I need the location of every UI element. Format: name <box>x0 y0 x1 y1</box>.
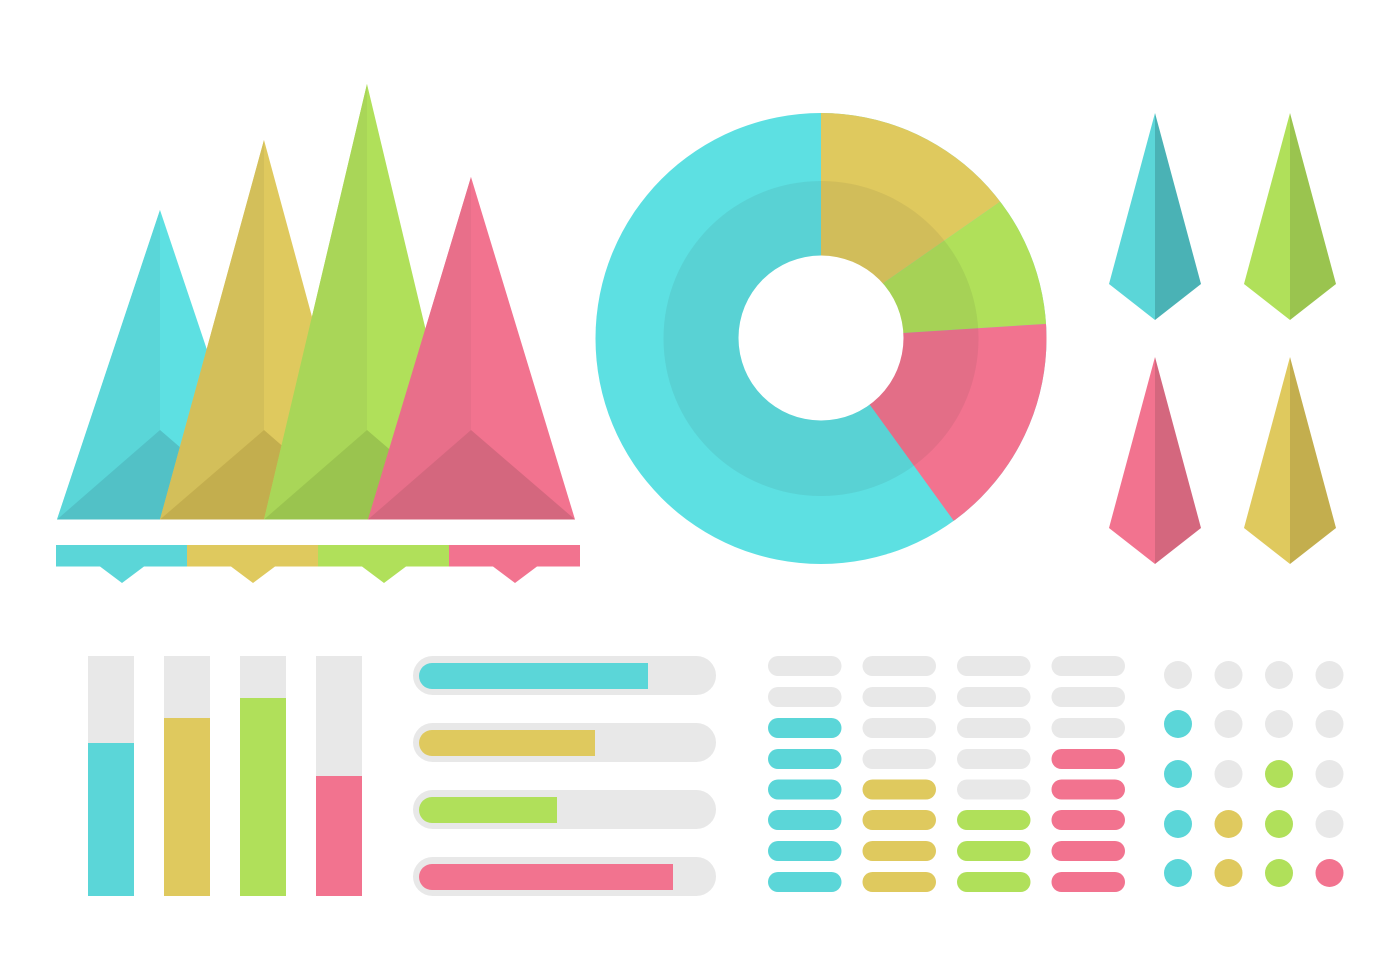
segment: pink <box>870 324 1046 521</box>
legend ribbon <box>56 545 580 583</box>
triangle: yellow <box>160 140 367 520</box>
triangle: pink <box>368 177 575 520</box>
kite icon: green <box>1244 113 1336 320</box>
kite icon: cyan <box>1109 113 1201 320</box>
triangle: cyan <box>57 210 264 520</box>
kite icon: yellow <box>1244 357 1336 564</box>
triangle chart <box>57 84 575 520</box>
vertical bar chart <box>88 656 362 896</box>
horizontal progress bars <box>413 656 716 896</box>
donut hole <box>738 256 904 420</box>
donut chart <box>596 113 1046 564</box>
segment: cyan <box>596 113 1046 564</box>
dot grid <box>1164 661 1344 887</box>
triangle: green <box>264 84 471 520</box>
segment: yellow <box>821 113 1000 284</box>
segment: green <box>883 202 1046 333</box>
kite icon: pink <box>1109 357 1201 564</box>
inner ring shade <box>664 181 978 496</box>
pill grid <box>768 656 1125 892</box>
